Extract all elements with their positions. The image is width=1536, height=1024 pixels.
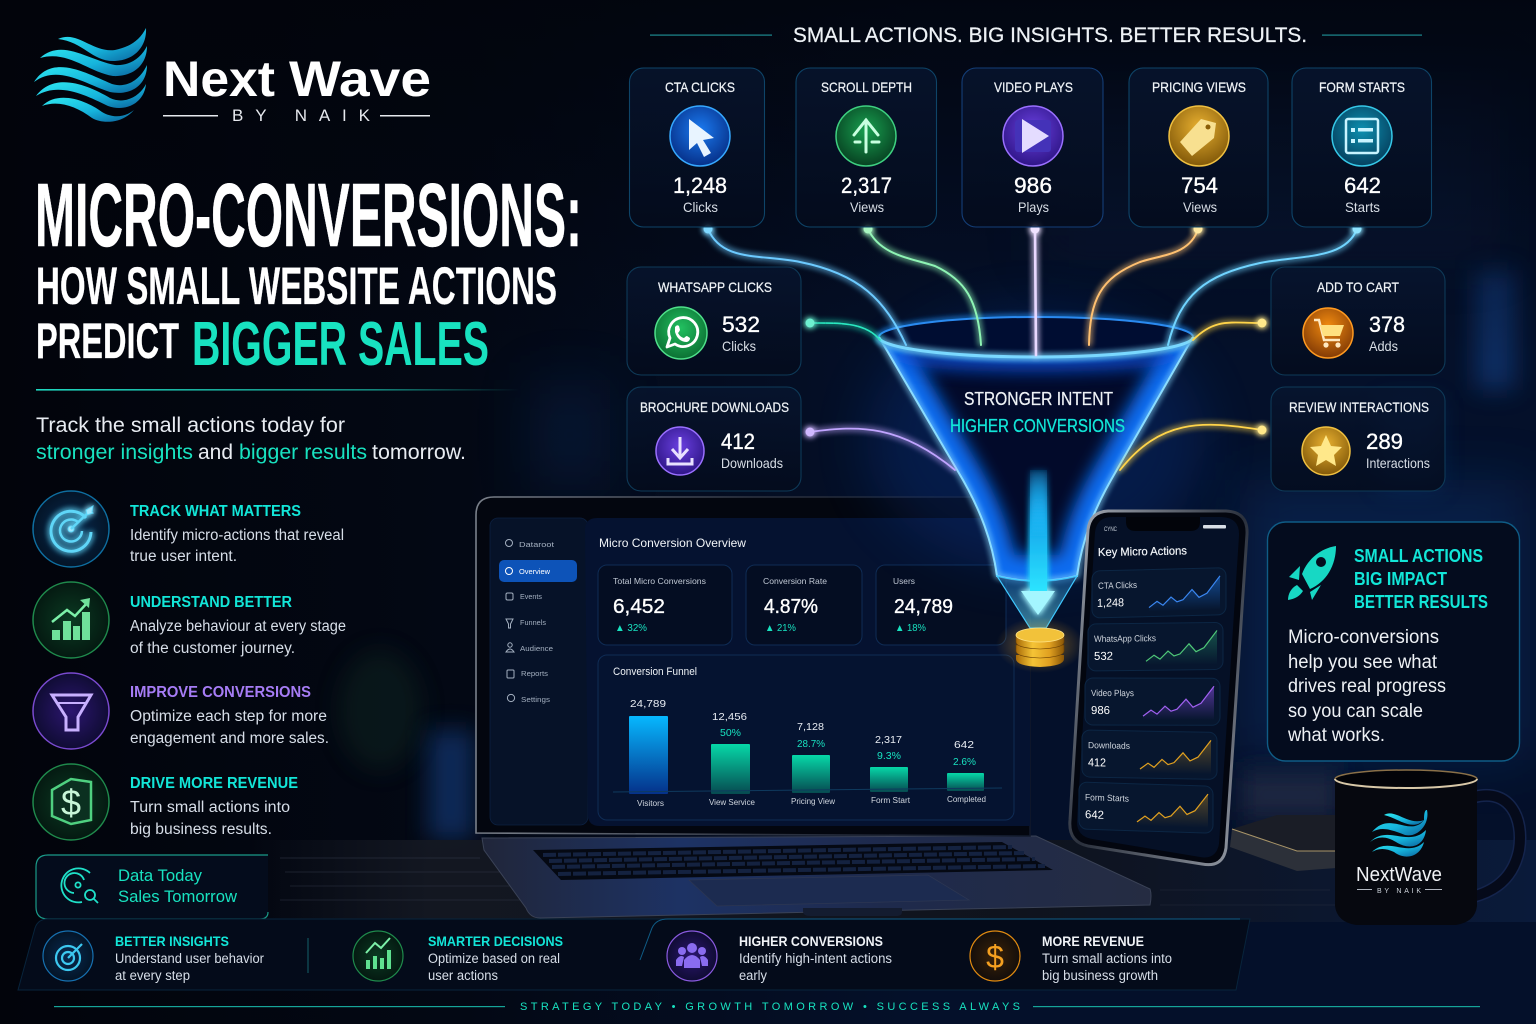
phone row: CTA clicks: CTA Clicks	[1098, 580, 1137, 591]
icon: target small	[43, 931, 93, 981]
connector: CTA clicks	[708, 229, 906, 345]
funnel label	[950, 389, 1125, 436]
panel: small actions big impact: BETTER RESULTS	[1354, 592, 1488, 612]
card: video plays: VIDEO PLAYS	[994, 79, 1073, 95]
benefit: understand better	[33, 582, 346, 658]
icon: cart	[1303, 308, 1353, 358]
bar chart: conversion funnel: Pricing View	[791, 797, 835, 806]
card: whatsapp clicks: WHATSAPP CLICKS	[658, 279, 772, 295]
arrow	[1021, 470, 1055, 615]
mug	[1335, 770, 1520, 925]
benefit: understand better: of the customer journey.	[130, 640, 295, 657]
benefit: higher conversions: Identify high-intent actions	[739, 951, 892, 966]
wordmark: Next	[163, 51, 275, 107]
card: CTA clicks: CTA CLICKS	[665, 79, 735, 95]
bar chart: conversion funnel: Visitors	[637, 799, 664, 808]
icon: wave mark	[34, 28, 147, 122]
card: scroll depth: Views	[850, 199, 884, 215]
benefit: more revenue: big business growth	[1042, 968, 1158, 983]
icon: chart small	[353, 931, 403, 981]
dashboard main	[585, 518, 1030, 826]
benefit: drive more revenue: big business results.	[130, 821, 272, 838]
phone row: form starts	[1079, 782, 1213, 833]
KPI: conversion rate	[746, 565, 862, 645]
tagline: bigger results	[239, 441, 367, 464]
callout: data today: Sales Tomorrow	[118, 888, 237, 906]
phone: Key Micro Actions	[1098, 545, 1187, 559]
connector: brochure	[810, 429, 955, 470]
phone status bar: CYNC	[1104, 527, 1117, 533]
funnel mouth	[879, 317, 1193, 357]
KPI: users: 24,789	[894, 596, 953, 618]
icon: users	[667, 931, 717, 981]
card: pricing views	[1129, 68, 1268, 227]
card: whatsapp clicks: 532	[722, 312, 760, 337]
title: PREDICT	[36, 313, 179, 369]
laptop	[476, 497, 1151, 918]
title: BIGGER SALES	[192, 310, 489, 379]
card: whatsapp clicks	[627, 267, 801, 375]
dashboard sidebar: Dataroot	[519, 540, 555, 549]
title: HOW SMALL WEBSITE ACTIONS	[36, 257, 557, 316]
card: review interactions: Interactions	[1366, 455, 1430, 471]
phone row: whatsapp clicks: 532	[1094, 651, 1113, 663]
icon: growth chart	[33, 582, 109, 658]
icon: scroll arrow	[836, 106, 896, 166]
bar chart: conversion funnel: 7,128	[797, 721, 824, 733]
section header: SMALL ACTIONS. BIG INSIGHTS. BETTER RESULTS.	[793, 24, 1307, 47]
coin stack	[996, 617, 1084, 673]
card: form starts: 642	[1344, 173, 1381, 198]
card: CTA clicks	[630, 68, 764, 227]
card: pricing views: Views	[1183, 199, 1217, 215]
mug logo	[1356, 810, 1442, 895]
KPI: total micro conversions: 6,452	[613, 596, 665, 618]
card: CTA clicks: Clicks	[683, 199, 718, 215]
benefit: better insights	[43, 931, 264, 983]
benefit: better insights: BETTER INSIGHTS	[115, 933, 229, 949]
benefit: smarter decisions: SMARTER DECISIONS	[428, 933, 563, 949]
phone row: downloads: Downloads	[1088, 740, 1130, 751]
panel: small actions big impact: so you can scale	[1288, 701, 1423, 722]
connector: add to cart	[1193, 323, 1262, 340]
icon: dollar shield	[33, 764, 109, 840]
connector: video plays	[1035, 229, 1036, 355]
laptop screen	[476, 497, 1030, 836]
panel: small actions big impact: SMALL ACTIONS	[1354, 546, 1483, 566]
panel: small actions big impact: help you see what	[1288, 652, 1438, 673]
icon: price tag	[1169, 106, 1229, 166]
card: brochure downloads: BROCHURE DOWNLOADS	[640, 399, 789, 415]
connector nodes	[704, 224, 1362, 436]
laptop base	[482, 836, 1151, 918]
benefit: better insights: at every step	[115, 968, 190, 983]
dashboard sidebar: Audience	[520, 644, 553, 653]
KPI: users	[876, 565, 1006, 645]
phone row: video plays	[1085, 678, 1220, 725]
wordmark	[163, 51, 431, 125]
wordmark: BY NAIK	[232, 106, 371, 125]
icon: funnel	[33, 673, 109, 749]
dashboard sidebar	[490, 518, 588, 825]
icon: form	[1332, 106, 1392, 166]
KPI: conversion rate: ▲ 21%	[765, 623, 796, 634]
callout: data today: Data Today	[118, 867, 203, 885]
benefit: higher conversions: early	[739, 968, 767, 983]
benefit: track what matters: Identify micro-actions that reveal	[130, 527, 344, 544]
benefit: more revenue: Turn small actions into	[1042, 951, 1172, 966]
benefit: drive more revenue	[33, 764, 298, 840]
connector: form starts	[1168, 229, 1357, 345]
panel: small actions big impact: what works.	[1287, 725, 1385, 746]
benefit: improve conversions	[33, 673, 329, 749]
icon: star	[1302, 427, 1350, 475]
tagline	[36, 414, 466, 464]
notebook	[1230, 815, 1336, 871]
connector: reviews	[1120, 425, 1262, 470]
bar chart: conversion funnel	[598, 655, 1014, 820]
phone row: video plays: 986	[1091, 705, 1110, 717]
bar chart: conversion funnel: Completed	[947, 795, 986, 804]
bar chart: conversion funnel: Form Start	[871, 796, 911, 805]
metric cards: left	[627, 267, 801, 491]
icon: play	[1003, 106, 1063, 166]
phone notch	[1126, 517, 1200, 531]
KPI: users: Users	[893, 576, 915, 586]
mug logo: NextWave	[1356, 864, 1442, 886]
connectors	[708, 229, 1357, 470]
benefit: understand better: UNDERSTAND BETTER	[130, 594, 292, 611]
icon: rocket	[1288, 546, 1336, 600]
card: brochure downloads: 412	[721, 429, 755, 454]
bottom strip	[18, 919, 1250, 990]
benefit list	[33, 491, 346, 840]
card: add to cart	[1271, 267, 1445, 375]
benefit: smarter decisions	[353, 931, 563, 983]
bar chart: conversion funnel: 642	[954, 739, 974, 751]
KPI: users: ▲ 18%	[895, 623, 926, 634]
benefit: smarter decisions: user actions	[428, 968, 498, 983]
benefit: smarter decisions: Optimize based on real	[428, 951, 560, 966]
icon: dollar	[970, 931, 1020, 981]
dashboard sidebar: Settings	[521, 695, 550, 704]
phone row: form starts: 642	[1085, 809, 1104, 822]
KPI: total micro conversions	[598, 565, 732, 645]
phone row: whatsapp clicks: WhatsApp Clicks	[1094, 633, 1156, 644]
card: form starts: Starts	[1345, 199, 1380, 215]
phone row: downloads: 412	[1088, 757, 1106, 769]
KPI: total micro conversions: ▲ 32%	[615, 623, 647, 634]
panel: small actions big impact: BIG IMPACT	[1354, 569, 1447, 589]
connector: whatsapp	[810, 323, 880, 340]
phone body	[1070, 511, 1247, 865]
bar chart: conversion funnel: 24,789	[630, 698, 666, 710]
panel: small actions big impact: Micro-conversions	[1288, 627, 1439, 648]
wordmark: Wave	[289, 51, 431, 107]
benefit: more revenue	[970, 931, 1172, 983]
tagline: Track the small actions today for	[36, 414, 345, 437]
card: video plays: 986	[1014, 173, 1052, 198]
tagline: and	[198, 441, 233, 464]
card: add to cart: 378	[1369, 312, 1405, 337]
card: pricing views: 754	[1181, 173, 1218, 198]
benefit: understand better: Analyze behaviour at every stage	[130, 618, 346, 635]
phone	[1070, 511, 1247, 865]
brand logo	[34, 28, 431, 125]
card: whatsapp clicks: Clicks	[722, 338, 756, 354]
dashboard sidebar: Funnels	[520, 618, 546, 627]
KPI: conversion rate: 4.87%	[764, 596, 818, 618]
phone row: CTA clicks: 1,248	[1097, 597, 1124, 610]
card: form starts	[1292, 68, 1432, 227]
metric cards: top row	[630, 68, 1432, 227]
title	[35, 166, 582, 379]
card: add to cart: ADD TO CART	[1317, 279, 1399, 295]
funnel body	[879, 337, 1193, 581]
funnel	[866, 310, 1206, 628]
phone row: video plays: Video Plays	[1091, 688, 1134, 698]
phone status bar	[1104, 525, 1226, 533]
icon: whatsapp	[655, 307, 707, 359]
bar chart: conversion funnel: View Service	[709, 798, 756, 807]
bar chart: conversion funnel: 12,456	[712, 711, 747, 723]
icon: dollar: $	[986, 939, 1004, 975]
benefit: improve conversions: Optimize each step for more	[130, 708, 327, 725]
dashboard sidebar: Overview	[519, 567, 551, 576]
KPI: total micro conversions: Total Micro Conversions	[613, 576, 706, 586]
benefit: more revenue: MORE REVENUE	[1042, 933, 1144, 949]
card: review interactions: 289	[1366, 429, 1403, 454]
icon: download	[656, 427, 704, 475]
benefit: track what matters: TRACK WHAT MATTERS	[130, 503, 301, 520]
dashboard sidebar: Events	[520, 592, 542, 601]
bar chart: conversion funnel: Conversion Funnel	[613, 666, 697, 678]
panel: small actions big impact	[1268, 522, 1520, 761]
tagline: stronger insights	[36, 441, 193, 464]
card: brochure downloads	[627, 387, 801, 491]
tagline: tomorrow.	[372, 441, 466, 464]
phone row: CTA clicks	[1092, 568, 1226, 618]
card: scroll depth: 2,317	[841, 173, 892, 198]
benefit: track what matters	[33, 491, 344, 567]
bar chart: conversion funnel: 50%	[720, 727, 741, 739]
phone row: whatsapp clicks	[1088, 622, 1223, 671]
benefit: track what matters: true user intent.	[130, 548, 237, 565]
bar chart: conversion funnel: 2.6%	[953, 756, 976, 768]
card: pricing views: PRICING VIEWS	[1152, 79, 1246, 95]
card: video plays	[962, 68, 1103, 227]
benefit: higher conversions	[667, 931, 892, 983]
card: form starts: FORM STARTS	[1319, 79, 1405, 95]
icon: data search	[61, 868, 98, 903]
KPI: conversion rate: Conversion Rate	[763, 576, 827, 586]
callout: data today	[36, 855, 268, 919]
icon: target	[33, 491, 109, 567]
connector: pricing views	[1089, 229, 1198, 345]
mug rim	[1335, 770, 1477, 788]
funnel neck beam	[997, 576, 1077, 628]
benefit: better insights: Understand user behavior	[115, 951, 264, 966]
card: scroll depth: SCROLL DEPTH	[821, 79, 912, 95]
bar chart: conversion funnel: 28.7%	[797, 738, 825, 750]
bar chart: conversion funnel: 9.3%	[877, 750, 901, 762]
connector: scroll depth	[868, 229, 981, 345]
benefit: improve conversions: IMPROVE CONVERSIONS	[130, 684, 311, 701]
funnel label: STRONGER INTENT	[964, 389, 1113, 409]
mug handle	[1472, 795, 1520, 897]
dashboard main: Micro Conversion Overview	[599, 536, 746, 550]
phone row: downloads	[1082, 730, 1217, 779]
metric cards: right	[1271, 267, 1445, 491]
footer tagline: STRATEGY TODAY • GROWTH TOMORROW • SUCCESS ALWAYS	[520, 1001, 1020, 1013]
benefit: improve conversions: engagement and more sales.	[130, 730, 329, 747]
mug logo: BY NAIK	[1377, 888, 1421, 895]
title: MICRO-CONVERSIONS:	[35, 166, 582, 266]
bar chart: conversion funnel: 2,317	[875, 734, 902, 746]
phone row: form starts: Form Starts	[1085, 792, 1129, 804]
funnel label: HIGHER CONVERSIONS	[950, 416, 1125, 436]
card: video plays: Plays	[1018, 199, 1049, 215]
benefit: higher conversions: HIGHER CONVERSIONS	[739, 933, 883, 949]
benefit: drive more revenue: Turn small actions into	[130, 799, 290, 816]
card: review interactions: REVIEW INTERACTIONS	[1289, 399, 1429, 415]
card: review interactions	[1271, 387, 1445, 491]
panel: small actions big impact: drives real progress	[1288, 676, 1446, 697]
dashboard sidebar: Reports	[521, 669, 548, 678]
card: add to cart: Adds	[1369, 338, 1398, 354]
card: scroll depth	[796, 68, 936, 227]
benefit: drive more revenue: DRIVE MORE REVENUE	[130, 775, 298, 792]
card: CTA clicks: 1,248	[673, 173, 727, 198]
card: brochure downloads: Downloads	[721, 455, 783, 471]
icon: cursor	[670, 106, 730, 166]
icon: dollar shield: $	[61, 782, 81, 823]
mug body	[1335, 780, 1477, 925]
